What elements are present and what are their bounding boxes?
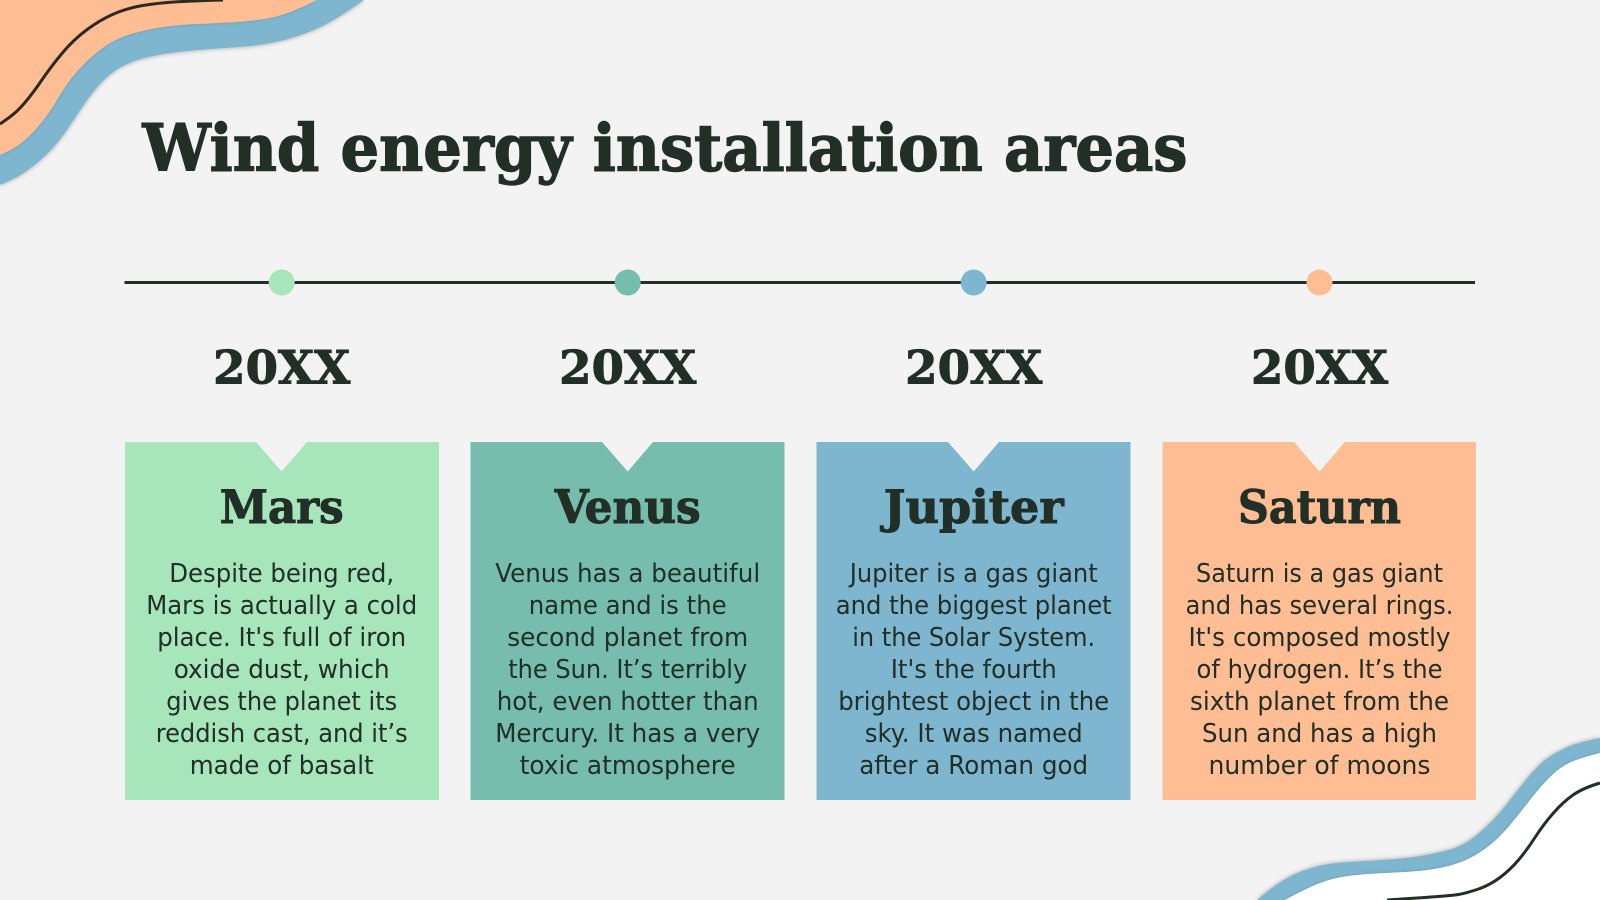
- card text: Jupiter: brightest object in the: [838, 687, 1109, 717]
- card text: Mars: place. It's full of iron: [157, 623, 406, 653]
- card heading: Mars: Mars: [220, 480, 344, 534]
- card text: Jupiter: sky. It was named: [865, 719, 1083, 749]
- card text: Venus: Mercury. It has a very: [495, 719, 760, 749]
- column: Mars: [125, 340, 439, 800]
- card text: Venus: hot, even hotter than: [497, 687, 759, 717]
- card text: Jupiter: [836, 559, 1112, 781]
- card text: Venus: [495, 559, 760, 781]
- card text: Mars: Despite being red,: [169, 559, 394, 589]
- column: Jupiter: [816, 340, 1130, 800]
- card text: Venus: toxic atmosphere: [520, 751, 736, 781]
- card heading: Jupiter: Jupiter: [880, 480, 1064, 534]
- title: Wind energy installation areas: [142, 110, 1188, 186]
- card text: Saturn: of hydrogen. It’s the: [1196, 655, 1442, 685]
- card text: Saturn: It's composed mostly: [1188, 623, 1450, 653]
- card background: Venus: [470, 442, 784, 800]
- card text: Mars: [146, 559, 417, 781]
- card text: Mars: Mars is actually a cold: [146, 591, 417, 621]
- card text: Saturn: sixth planet from the: [1190, 687, 1449, 717]
- card text: Mars: oxide dust, which: [174, 655, 390, 685]
- card text: Jupiter: in the Solar System.: [852, 623, 1095, 653]
- card text: Mars: gives the planet its: [166, 687, 397, 717]
- year: Jupiter: 20XX: [905, 340, 1043, 394]
- timeline: [124, 270, 1475, 296]
- card text: Jupiter: after a Roman god: [859, 751, 1088, 781]
- card text: Mars: reddish cast, and it’s: [156, 719, 408, 749]
- column: Saturn: [1162, 340, 1476, 800]
- card text: Jupiter: and the biggest planet: [836, 591, 1112, 621]
- card text: Saturn: [1186, 559, 1454, 781]
- timeline dot: Saturn: [1306, 270, 1332, 296]
- card background: Mars: [125, 442, 439, 800]
- card background: Jupiter: [816, 442, 1130, 800]
- card text: Saturn: Saturn is a gas giant: [1196, 559, 1443, 589]
- column: Venus: [470, 340, 784, 800]
- decoration: top-left wave: [0, 0, 364, 185]
- card text: Venus: the Sun. It’s terribly: [508, 655, 747, 685]
- card text: Jupiter: Jupiter is a gas giant: [848, 559, 1098, 589]
- card text: Saturn: number of moons: [1208, 751, 1430, 781]
- card text: Mars: made of basalt: [190, 751, 374, 781]
- timeline dot: Jupiter: [961, 270, 987, 296]
- decoration: bottom-right wave: [1257, 738, 1600, 900]
- year: Venus: 20XX: [559, 340, 697, 394]
- year: Saturn: 20XX: [1251, 340, 1388, 394]
- card text: Saturn: and has several rings.: [1186, 591, 1454, 621]
- card text: Saturn: Sun and has a high: [1202, 719, 1437, 749]
- year: Mars: 20XX: [213, 340, 351, 394]
- card heading: Saturn: Saturn: [1238, 480, 1401, 534]
- timeline dot: Mars: [269, 270, 295, 296]
- card text: Venus: name and is the: [529, 591, 727, 621]
- card heading: Venus: Venus: [554, 480, 701, 534]
- card background: Saturn: [1162, 442, 1476, 800]
- timeline dot: Venus: [615, 270, 641, 296]
- card text: Venus: Venus has a beautiful: [495, 559, 760, 589]
- card text: Jupiter: It's the fourth: [891, 655, 1057, 685]
- card text: Venus: second planet from: [507, 623, 748, 653]
